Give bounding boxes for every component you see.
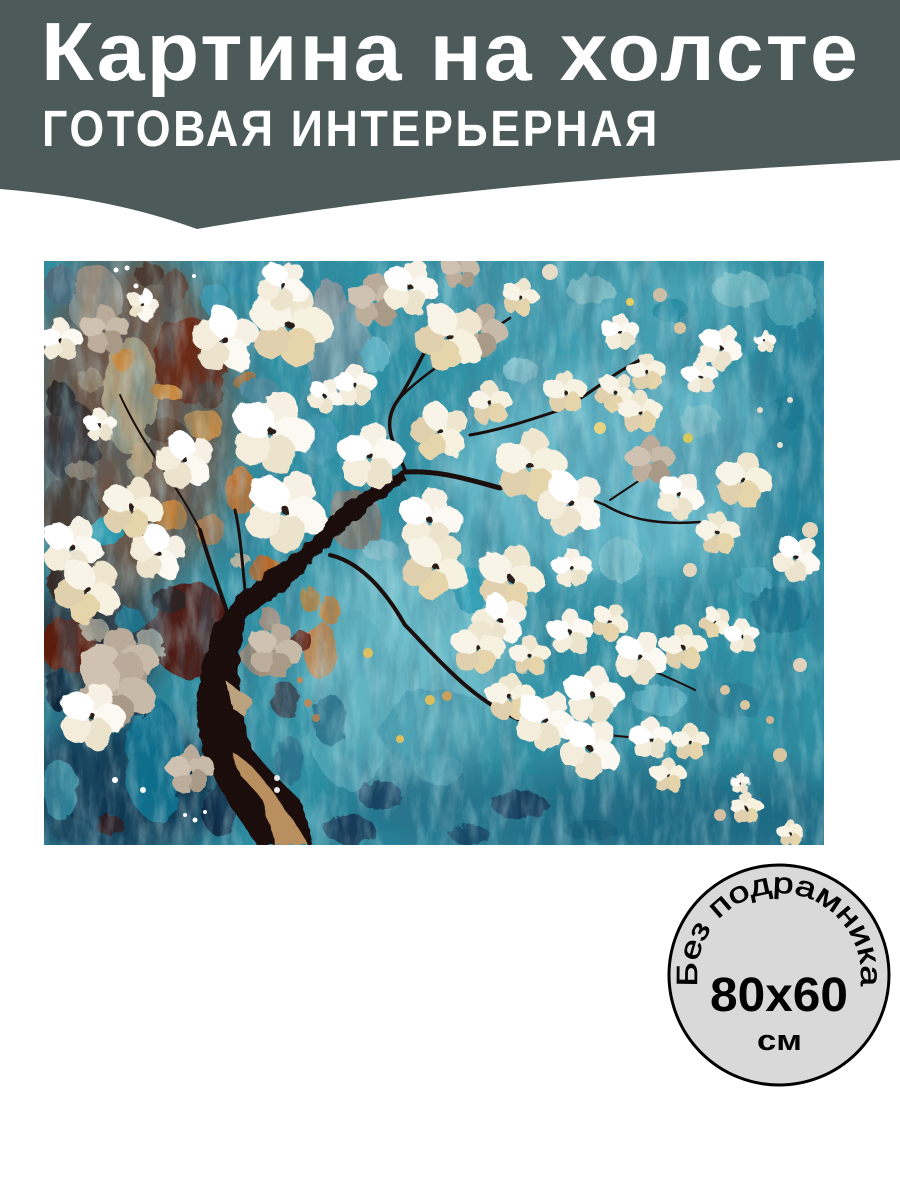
painting background <box>44 261 824 845</box>
tree trunk and branches <box>120 310 700 845</box>
background splatter dots <box>112 264 818 822</box>
white blossoms <box>31 248 832 845</box>
painting: blossoming tree <box>44 261 824 845</box>
subtitle: ГОТОВАЯ ИНТЕРЬЕРНАЯ <box>42 100 660 157</box>
badge: size and no stretcher <box>668 864 890 1086</box>
dim background blossoms <box>61 251 675 792</box>
title: Картина на холсте <box>41 5 860 98</box>
size value: 80x60 <box>710 969 848 1022</box>
size unit: см <box>757 1025 802 1057</box>
curved label: Без подрамника <box>676 877 877 986</box>
header banner <box>0 0 900 229</box>
painterly dabs <box>44 263 816 845</box>
